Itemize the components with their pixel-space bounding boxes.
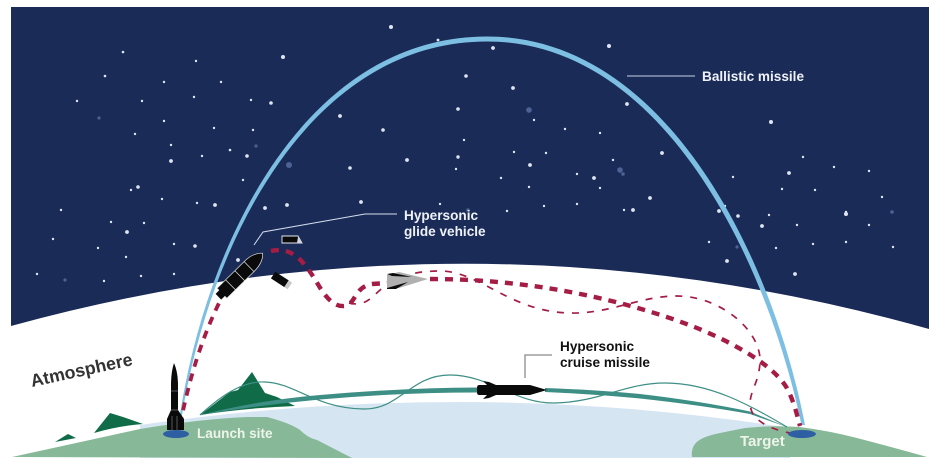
ocean [140,402,790,458]
cruise missile thin trajectory [200,375,787,427]
leader line: glide vehicle [254,214,397,245]
mountains [55,372,295,442]
label: hypersonic glide vehicle: glide vehicle [404,224,486,239]
panel: night sky [11,7,929,332]
label: hypersonic cruise missile: cruise missile [560,355,650,370]
launch pad [163,430,189,438]
icon: spent booster stage [271,272,292,289]
icon: hypersonic glide vehicle [387,272,428,289]
land: target [692,426,927,457]
label: hypersonic cruise missile: Hypersonic [560,339,634,354]
label: atmosphere: Atmosphere [29,349,134,391]
cruise missile thick trajectory [200,388,787,427]
ballistic missile trajectory [178,36,805,428]
icon: rocket on launch pad [167,363,184,430]
leader line: ballistic missile [627,75,695,77]
leader line: cruise missile [525,355,552,378]
stars [36,25,894,282]
atmosphere [0,264,945,458]
label: launch site: Launch site [197,426,273,441]
land: launch site [12,417,352,458]
label: hypersonic glide vehicle: Hypersonic [404,208,478,223]
icon: separated nose shroud [282,236,302,243]
hypersonic glide vehicle thick trajectory [180,250,800,426]
icon: hypersonic cruise missile [477,381,547,399]
target marker [788,430,816,438]
label: target: Target [740,433,785,450]
label: ballistic missile: Ballistic missile [702,69,804,84]
hypersonic glide vehicle thin trajectory [349,271,790,433]
icon: boost rocket in flight [213,248,268,302]
